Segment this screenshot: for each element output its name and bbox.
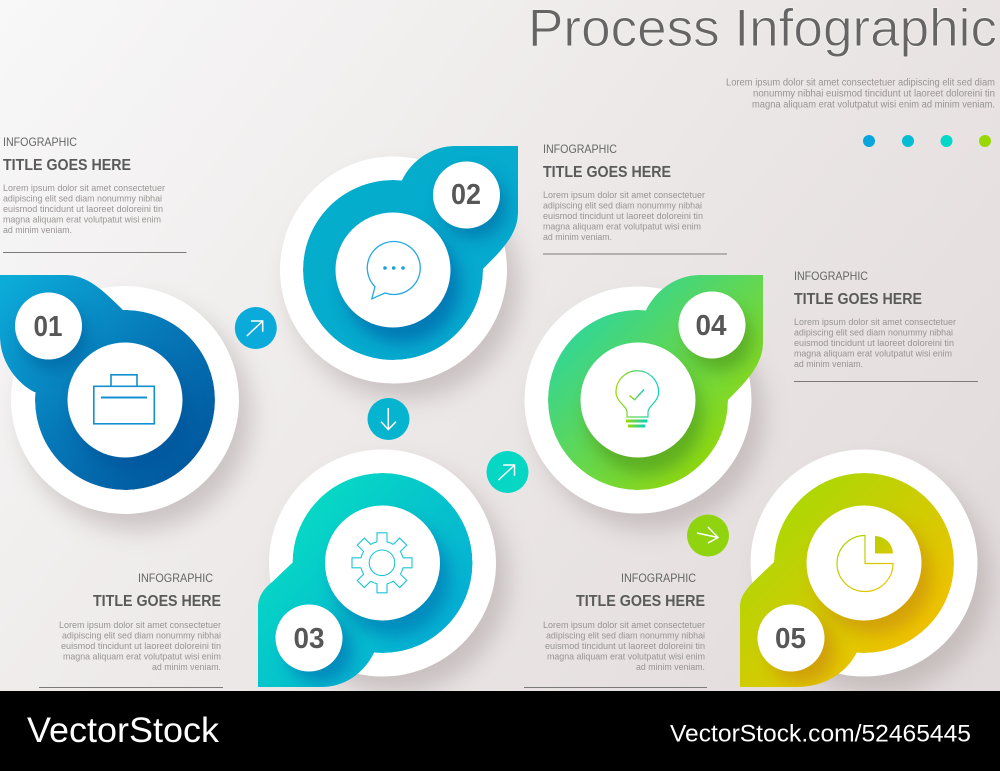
text block 03: INFOGRAPHIC <box>138 571 213 585</box>
white outer disc 05 <box>750 450 978 676</box>
text block 02: TITLE GOES HERE <box>543 164 671 181</box>
text block 02: magna aliquam erat volutpatut wisi enim <box>543 222 701 232</box>
icon: briefcase <box>94 375 154 424</box>
coloured ring and drop 04 <box>548 275 763 490</box>
text block 01: magna aliquam erat volutpatut wisi enim <box>3 214 161 224</box>
footer image id: VectorStock.com/52465445 <box>670 720 971 748</box>
footer logo text: VectorStock <box>27 711 220 750</box>
white outer disc 01 <box>11 286 239 514</box>
text block 05: adipiscing elit sed diam nonummy nibhai <box>546 630 705 640</box>
header description <box>726 78 995 110</box>
number badge 04 <box>678 292 746 358</box>
text block 04: INFOGRAPHIC <box>794 269 868 283</box>
coloured ring and drop 01 <box>0 275 215 490</box>
text block 03: Lorem ipsum dolor sit amet consectetuer <box>59 620 221 630</box>
number badge 02 <box>433 162 500 228</box>
number badge 01: 01 <box>34 311 62 343</box>
number badge 05 <box>758 604 824 672</box>
coloured ring and drop 05 <box>740 473 954 687</box>
text block 04: TITLE GOES HERE <box>794 291 922 308</box>
text block 04: adipiscing elit sed diam nonummy nibhai <box>794 328 953 338</box>
text block 01: INFOGRAPHIC <box>3 135 77 149</box>
text block 02: euismod tincidunt ut laoreet doloreini tin <box>543 211 703 221</box>
text block 02: INFOGRAPHIC <box>543 142 617 156</box>
text block 04 <box>794 269 978 382</box>
inner white disc 04 <box>580 342 696 458</box>
text block 03 <box>39 571 223 688</box>
icon: light bulb <box>616 371 659 428</box>
text block 02: ad minim veniam. <box>543 232 612 242</box>
step 04 <box>524 275 764 530</box>
text block 01: Lorem ipsum dolor sit amet consectetuer <box>3 183 165 193</box>
text block 04: euismod tincidunt ut laoreet doloreini tin <box>794 338 954 348</box>
text block 04: ad minim veniam. <box>794 359 863 369</box>
icon: speech bubble <box>367 241 420 299</box>
inner white disc 01 <box>68 342 182 458</box>
step 03 <box>258 450 509 693</box>
text block 04: Lorem ipsum dolor sit amet consectetuer <box>794 317 956 327</box>
text block 01: TITLE GOES HERE <box>3 157 131 174</box>
inner white disc 03 <box>325 506 440 620</box>
arrow 4 to 5 <box>687 514 729 556</box>
number badge 02: 02 <box>451 179 481 211</box>
text block 05: TITLE GOES HERE <box>576 593 705 610</box>
text block 03: TITLE GOES HERE <box>93 593 221 610</box>
number badge 03: 03 <box>294 623 324 655</box>
step 01 <box>0 275 251 530</box>
title: Process Infographic <box>528 0 997 58</box>
number badge 03 <box>276 604 342 672</box>
step 02 <box>280 146 519 400</box>
number badge 01 <box>15 292 82 360</box>
coloured ring and drop 03 <box>258 473 472 687</box>
text block 02: Lorem ipsum dolor sit amet consectetuer <box>543 190 705 200</box>
icon: pie chart <box>837 536 893 592</box>
white outer disc 04 <box>524 286 752 514</box>
inner white disc 02 <box>336 212 450 328</box>
text block 05: magna aliquam erat volutpatut wisi enim <box>547 652 705 662</box>
text block 03: euismod tincidunt ut laoreet doloreini tin <box>61 641 221 651</box>
text block 05: Lorem ipsum dolor sit amet consectetuer <box>543 620 705 630</box>
inner white disc 05 <box>806 506 922 620</box>
white outer disc 03 <box>269 450 496 676</box>
number badge 05: 05 <box>775 623 806 655</box>
text block 04: magna aliquam erat volutpatut wisi enim <box>794 348 952 358</box>
text block 02 <box>543 142 727 254</box>
text block 01 <box>3 135 186 252</box>
number badge 04: 04 <box>696 310 726 342</box>
footer bar <box>0 691 1000 771</box>
text block 03: magna aliquam erat volutpatut wisi enim <box>63 652 221 662</box>
arrow 2 to 3 <box>368 398 410 440</box>
text block 05: euismod tincidunt ut laoreet doloreini tin <box>545 641 705 651</box>
arrow 1 to 2 <box>235 307 277 349</box>
text block 01: euismod tincidunt ut laoreet doloreini tin <box>3 204 163 214</box>
text block 03: ad minim veniam. <box>152 662 221 672</box>
text block 01: ad minim veniam. <box>3 225 72 235</box>
white outer disc 02 <box>280 156 507 384</box>
step 05 <box>740 450 990 693</box>
text block 05 <box>524 571 707 688</box>
header description: nonummy nibhai euismod tincidunt ut laoreet doloreini tin <box>753 88 995 100</box>
text block 02: adipiscing elit sed diam nonummy nibhai <box>543 200 702 210</box>
legend dots <box>863 135 991 147</box>
text block 01: adipiscing elit sed diam nonummy nibhai <box>3 194 162 204</box>
text block 05: INFOGRAPHIC <box>621 571 696 585</box>
coloured ring and drop 02 <box>303 146 518 360</box>
arrow 3 to 4 <box>486 451 528 493</box>
icon: gear <box>352 533 412 593</box>
text block 05: ad minim veniam. <box>636 662 705 672</box>
text block 03: adipiscing elit sed diam nonummy nibhai <box>62 630 221 640</box>
